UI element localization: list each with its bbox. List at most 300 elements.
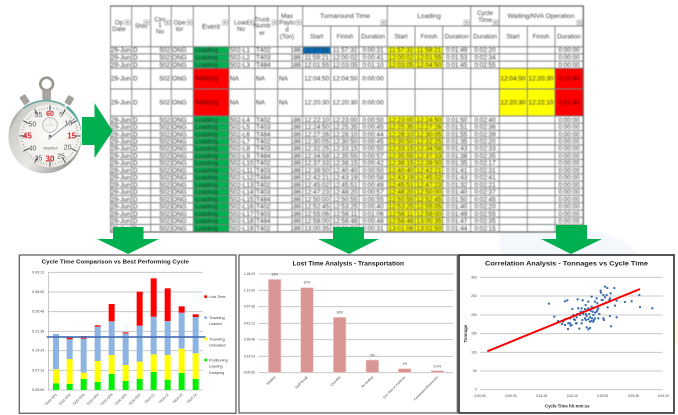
y axis labels: 1:26:24 (244, 272, 255, 276)
chart legend: Loading (209, 364, 223, 368)
table rows: 12:34:58 (304, 153, 330, 160)
table rows: 0:01:45 (446, 62, 468, 69)
table rows: 29-Jun (111, 211, 131, 218)
table rows: D (133, 167, 138, 174)
chart legend: Positioning (209, 358, 228, 362)
table rows: D (133, 100, 138, 107)
table rows: 12:04:50 (333, 76, 358, 83)
table rows: 12:56:11 (333, 211, 358, 218)
table rows: 502-L10 (230, 160, 254, 167)
x axis labels: Staff Break (294, 375, 309, 390)
table rows: 502 (159, 225, 170, 232)
table rows: 12:58:00 (304, 218, 330, 225)
table rows: D (133, 76, 138, 83)
table rows: 502-L6 (230, 131, 250, 138)
table header: tor (176, 26, 183, 33)
table rows: 0:02:40 (474, 117, 496, 124)
scatter points (548, 285, 653, 330)
table rows: T403 (256, 189, 271, 196)
table rows: 0:01:06 (362, 211, 384, 218)
table rows: D (133, 196, 138, 203)
table rows: 186 (290, 160, 301, 167)
table rows: 13:00:35 (417, 218, 442, 225)
table rows: 12:30:05 (304, 138, 330, 146)
table rows: 12:24:50 (304, 124, 330, 131)
x axis labels: Queuing (330, 375, 341, 387)
y axis labels: 0:28:48 (32, 310, 44, 314)
table header: Duration (557, 34, 581, 40)
table rows: 29-Jun (111, 175, 131, 182)
table rows: 12:03:05 (333, 62, 358, 69)
table header: Finish (421, 34, 438, 40)
table rows: 12:50:00 (417, 189, 442, 196)
table rows: 502-L12 (230, 175, 254, 182)
table rows: Loading (195, 211, 218, 218)
table rows: 0:01:41 (446, 167, 468, 174)
icon: stopwatch: 55 (34, 112, 42, 119)
y axis labels: 0:43:12 (32, 270, 44, 274)
arrow: table to lost time chart (318, 227, 379, 254)
bar value labels: 1% (402, 362, 407, 366)
icon: stopwatch: 45 (23, 132, 32, 141)
table rows: 502-L1 (230, 47, 250, 54)
icon: stopwatch: 5 (59, 111, 63, 118)
table rows: 0:00:50 (362, 117, 384, 124)
table rows: 0:01:47 (446, 218, 468, 225)
table rows: T402 (256, 204, 271, 211)
chart legend (204, 295, 228, 375)
y axis labels: 0:57:36 (244, 305, 255, 309)
y axis labels: 50 (473, 369, 477, 373)
table rows: 0:01:51 (446, 124, 468, 131)
x axis labels: T404-C1 (144, 392, 156, 405)
table rows: 11:59:21 (417, 47, 442, 54)
table rows: 12:27:26 (417, 124, 442, 131)
table rows: 29-Jun (111, 62, 131, 69)
table rows: 0:02:55 (474, 62, 496, 69)
table rows: 12:22:10 (529, 100, 554, 107)
table rows: 0:00:00 (558, 146, 580, 153)
table rows: 11:57:01 (304, 47, 329, 54)
table rows: 502 (159, 100, 170, 107)
table rows: 0:02:21 (474, 182, 496, 189)
x axis labels: 0:02:10 (567, 394, 578, 398)
x axis labels: 0:00:00 (474, 394, 486, 398)
bar value labels: 10% (336, 311, 343, 315)
table rows: 0:00:58 (362, 175, 384, 182)
best cycle line (47, 334, 206, 339)
table rows: 0:00:45 (362, 138, 384, 146)
icon: stopwatch: 15 (67, 131, 77, 140)
table rows: 0:00:00 (558, 47, 580, 54)
icon: stopwatch (8, 78, 82, 173)
icon: stopwatch: 35 (34, 156, 42, 163)
chart title: Correlation Analysis - Tonnages vs Cycle Time (485, 261, 649, 268)
table rows: 12:20:30 (501, 100, 526, 107)
table rows: ONG (172, 47, 187, 54)
x axis labels: T403-GR2 (58, 392, 72, 406)
table rows: 13:02:50 (417, 225, 442, 232)
table rows: 12:55:06 (304, 211, 330, 218)
x axis labels (474, 394, 669, 398)
table rows: T403 (256, 124, 271, 131)
table rows: Loading (195, 153, 218, 160)
y axis labels (244, 272, 255, 375)
table rows: 502 (159, 47, 170, 54)
table rows: 0:00:00 (558, 204, 580, 211)
table rows: 0:02:20 (474, 47, 496, 54)
table header: Time (478, 17, 492, 24)
table rows: 186 (290, 225, 301, 232)
table rows: 13:00:35 (304, 225, 330, 232)
table rows: 0:00:00 (558, 189, 580, 196)
table header: Paylo (279, 20, 295, 26)
table rows: 12:42:21 (304, 175, 330, 182)
y axis labels: 0:14:24 (32, 349, 44, 353)
table rows: 502-L14 (230, 189, 254, 196)
table rows: 502 (159, 131, 170, 138)
table rows: 186 (290, 167, 301, 174)
panel: lost time analysis chart (239, 255, 457, 413)
table rows: 29-Jun (111, 55, 131, 62)
table rows: 0:00:00 (558, 138, 580, 146)
table rows: ONG (172, 117, 187, 124)
table rows: D (133, 62, 138, 69)
table rows: 12:58:48 (389, 218, 414, 225)
x axis labels: T403-GR3 (72, 392, 86, 406)
table rows: 0:01:43 (446, 175, 468, 182)
table rows: 12:50:55 (333, 196, 358, 203)
table rows: T484 (256, 131, 271, 138)
table header: Truck (254, 16, 271, 24)
table rows: Loading (195, 182, 218, 189)
table rows: 0:00:48 (362, 218, 384, 225)
table rows: 12:30:50 (389, 138, 414, 146)
table rows: T484 (256, 62, 271, 69)
table rows: 0:02:55 (474, 211, 496, 218)
table rows: D (133, 47, 138, 54)
table rows: 0:01:40 (446, 204, 468, 211)
table rows: Loading (195, 204, 218, 211)
table rows: 502 (159, 196, 170, 203)
y axis labels: 200 (471, 313, 477, 317)
table header: Date (112, 26, 126, 33)
table rows: D (133, 124, 138, 131)
table rows: 186 (290, 153, 301, 160)
table header: Duration (361, 34, 385, 40)
table rows: 12:52:45 (417, 196, 442, 203)
table rows: 186 (290, 146, 301, 153)
table rows: 502-L4 (230, 117, 250, 124)
table rows: 12:58:48 (333, 218, 358, 225)
table rows: 0:00:00 (558, 62, 580, 69)
table rows: 0:02:45 (474, 196, 496, 203)
table rows: 11:57:32 (389, 47, 414, 54)
stacked bars (53, 278, 199, 390)
table rows: 0:00:41 (362, 55, 384, 62)
table rows: D (133, 218, 138, 225)
table rows: 12:28:10 (333, 131, 358, 138)
table rows: 0:00:00 (558, 167, 580, 174)
table rows: 0:00:44 (362, 131, 384, 138)
y axis labels: 250 (471, 294, 477, 298)
table rows: T402 (256, 138, 271, 146)
x axis labels: T404-C3 (172, 392, 184, 405)
y axis labels: 0 (475, 388, 477, 392)
icon: stopwatch: 50 (28, 121, 36, 128)
table rows: 29-Jun (111, 225, 131, 232)
table rows: 502 (159, 218, 170, 225)
x axis labels: T404-C2 (158, 392, 170, 405)
table rows: Loading (195, 189, 218, 196)
table rows: Loading (195, 175, 218, 182)
chart legend: Dumping (209, 371, 224, 375)
table rows: 12:38:15 (333, 160, 358, 167)
arrow: table to correlation chart (541, 225, 602, 254)
table rows: Loading (195, 55, 218, 62)
table rows: 502 (159, 175, 170, 182)
table rows: 12:22:10 (304, 117, 330, 124)
table header: (Ton) (280, 34, 294, 40)
table rows: 186 (290, 196, 301, 203)
table rows: 12:27:26 (304, 131, 330, 138)
table rows: 12:32:25 (304, 146, 330, 153)
table rows: 12:43:19 (333, 175, 358, 182)
table rows: 0:01:55 (446, 131, 468, 138)
trend line (487, 289, 640, 351)
chart title: Cycle Time Comparison vs Best Performing Cycle (42, 260, 190, 266)
table rows: ONG (172, 55, 187, 62)
icon: stopwatch: 20 (64, 145, 72, 152)
y axis title: Tonnage (463, 324, 468, 343)
table rows: 12:40:40 (333, 167, 358, 174)
table rows: 502-L11 (230, 167, 253, 174)
x axis labels: T403-GR1 (44, 392, 58, 406)
table rows: 0:01:50 (446, 117, 468, 124)
table rows: 0:00:49 (362, 182, 384, 189)
panel: data table (110, 6, 583, 232)
table rows: Loading (195, 138, 218, 146)
table rows: ONG (172, 124, 187, 131)
table rows: D (133, 204, 138, 211)
table rows (111, 47, 580, 232)
table rows: T403 (256, 211, 271, 218)
table rows: 0:01:40 (558, 100, 580, 107)
table rows: 186 (290, 124, 301, 131)
table rows: 0:02:36 (474, 124, 496, 131)
table rows: 12:25:35 (389, 124, 414, 131)
table rows: 12:33:15 (389, 146, 414, 153)
table rows: 0:00:57 (362, 153, 384, 160)
bar value labels: 2% (370, 353, 375, 357)
bar value labels: 16% (304, 281, 310, 285)
table rows: 12:39:50 (417, 160, 442, 167)
table rows: ONG (172, 167, 187, 174)
table rows: 0:00:00 (558, 55, 580, 62)
table rows: 12:45:51 (389, 182, 414, 189)
table rows: 502 (159, 146, 170, 153)
y axis labels: 0:00:00 (244, 371, 255, 375)
table rows: 29-Jun (111, 124, 131, 131)
x axis labels: Re-fueling (360, 375, 374, 389)
table rows: 0:00:00 (362, 76, 384, 83)
table rows: D (133, 153, 138, 160)
x axis labels: 0:02:53 (597, 394, 608, 398)
table header: Loading (417, 13, 441, 20)
panel: cycle time comparison chart (19, 255, 236, 413)
table rows: 12:33:15 (333, 146, 358, 153)
table rows: 0:00:45 (362, 124, 384, 131)
table rows: 502 (159, 124, 170, 131)
table rows: 502-L2 (230, 55, 250, 62)
table rows: 12:58:00 (417, 211, 442, 218)
table rows: D (133, 189, 138, 196)
table header: Turnaround Time (320, 13, 370, 20)
table rows: T484 (256, 218, 271, 225)
icon: stopwatch: 60 (46, 111, 54, 118)
x axis title: Cycle Time hh:mm:ss (545, 403, 590, 408)
y axis labels: 150 (471, 332, 477, 336)
table rows: 0:02:31 (474, 167, 496, 174)
table rows: 502-L8 (230, 146, 250, 153)
table header: Start (394, 34, 408, 40)
table rows: 0:02:15 (474, 225, 496, 232)
table rows: 0:00:42 (362, 160, 384, 167)
table header: No (237, 26, 246, 33)
table rows: 11:59:21 (304, 55, 329, 62)
table rows: D (133, 211, 138, 218)
table rows: 12:03:05 (389, 62, 414, 69)
table rows: ONG (172, 160, 187, 167)
table rows: 0:00:00 (558, 218, 580, 225)
table rows: T403 (256, 55, 271, 62)
table rows: Loading (195, 146, 218, 153)
table rows: 502 (159, 160, 170, 167)
table rows: 502 (159, 204, 170, 211)
table rows: 502 (159, 55, 170, 62)
table rows: 12:20:30 (333, 100, 358, 107)
table rows: D (133, 175, 138, 182)
table header: Start (310, 34, 324, 40)
table rows: 0:02:35 (474, 218, 496, 225)
table rows: Loading (195, 196, 218, 203)
table rows: 502-L18 (230, 218, 254, 225)
table rows: 186 (290, 138, 301, 146)
table rows: 12:04:50 (304, 76, 330, 83)
icon: stopwatch: 30 (46, 155, 55, 164)
table rows: 29-Jun (111, 167, 131, 174)
table rows: D (133, 160, 138, 167)
table rows: 12:25:35 (333, 124, 358, 131)
table rows: 0:02:34 (474, 55, 496, 62)
table rows: 186 (290, 211, 301, 218)
table rows: 12:20:30 (304, 100, 330, 107)
table rows: T484 (256, 175, 271, 182)
table rows: ONG (172, 146, 187, 153)
table rows: 12:48:20 (389, 189, 414, 196)
table rows: 0:00:55 (362, 196, 384, 203)
table rows: 502 (159, 76, 170, 83)
x axis labels: T404-GR1 (114, 392, 128, 406)
table rows: 0:02:39 (474, 131, 496, 138)
table rows: ONG (172, 131, 187, 138)
table rows: Waiting (195, 76, 218, 83)
table rows: 29-Jun (111, 153, 131, 160)
table header: Circ (154, 16, 166, 24)
table rows: 0:01:44 (446, 225, 468, 232)
table rows: 186 (290, 131, 301, 138)
table rows: 12:39:50 (304, 167, 330, 174)
table rows: T403 (256, 146, 271, 153)
y axis labels: 0:14:24 (244, 354, 255, 358)
table rows: ONG (172, 62, 187, 69)
table rows: ONG (172, 153, 187, 160)
table rows: 0:02:41 (474, 175, 496, 182)
table rows: 502 (159, 138, 170, 146)
y axis labels: 0:07:12 (32, 368, 44, 372)
table header: Numb (254, 22, 271, 30)
table rows: T484 (256, 153, 271, 160)
table rows: 0:00:50 (362, 167, 384, 174)
table rows: 29-Jun (111, 196, 131, 203)
table rows: 12:47:23 (417, 182, 442, 189)
x axis labels: Waiting (266, 375, 276, 386)
table header: Start (506, 34, 520, 40)
table rows: NA (279, 100, 289, 107)
table rows: D (133, 225, 138, 232)
table rows: Loading (195, 47, 218, 54)
table rows: 502 (159, 117, 170, 124)
table header: Waiting/NVA Operation (507, 13, 575, 20)
table rows: D (133, 138, 138, 146)
table rows: 502-L5 (230, 124, 250, 131)
table rows: Loading (195, 218, 218, 225)
table rows: 0:00:00 (362, 100, 384, 107)
table header: Op (115, 20, 124, 26)
table rows: 13:01:06 (389, 225, 414, 232)
table rows: 0:02:35 (474, 153, 496, 160)
table header: Ope (174, 20, 186, 26)
table rows: NA (230, 76, 240, 83)
table rows: 29-Jun (111, 182, 131, 189)
table header: Max (281, 13, 294, 20)
table rows: 0:00:31 (362, 225, 384, 232)
bar value labels: 19% (271, 272, 278, 276)
table rows: 502-L17 (230, 211, 254, 218)
bar value labels: 0.4% (434, 365, 441, 369)
table rows: 0:02:20 (474, 204, 496, 211)
table rows: 12:32:25 (417, 138, 442, 146)
table rows: 12:30:50 (333, 138, 358, 146)
table rows: 0:02:33 (474, 146, 496, 153)
table rows: Loading (195, 117, 218, 124)
table rows: 0:01:49 (446, 211, 468, 218)
table rows: 13:01:06 (333, 225, 358, 232)
table rows: 0:00:00 (558, 225, 580, 232)
table rows: 502 (159, 167, 170, 174)
table rows: 186 (290, 117, 301, 124)
table rows: 186 (290, 189, 301, 196)
x axis labels: 0:03:36 (628, 394, 639, 398)
table rows: 0:01:49 (446, 47, 468, 54)
table rows: 11:57:32 (333, 47, 358, 54)
x axis labels: Congestion/Obstruction (413, 375, 439, 401)
table rows: 29-Jun (111, 117, 131, 124)
table rows: 186 (290, 218, 301, 225)
table rows: D (133, 131, 138, 138)
y axis labels: 100 (471, 350, 477, 354)
table rows: 29-Jun (111, 204, 131, 211)
